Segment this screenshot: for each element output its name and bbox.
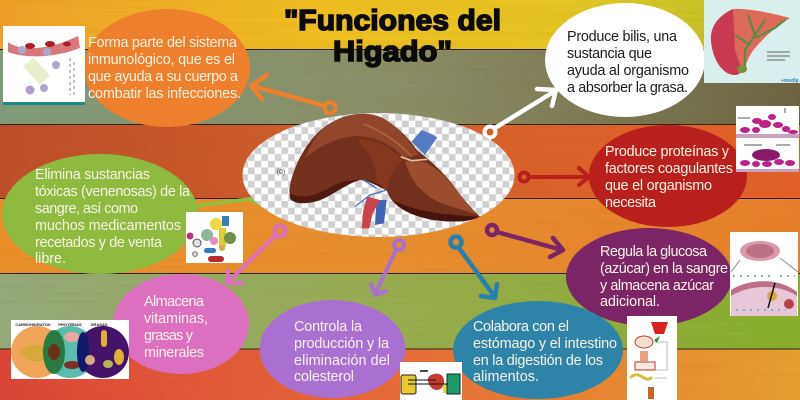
arrow: to proteins [520, 168, 589, 185]
icon: food plates: CARBOHIDRATOS [15, 322, 51, 327]
text: immune system: Forma parte del sistema [88, 35, 237, 51]
text: vitamins: minerales [144, 345, 204, 361]
icon: digestive diagram [627, 316, 677, 400]
icon: food plates [11, 320, 129, 379]
text: proteins: Produce proteínas y [605, 144, 730, 160]
panel: proteins [589, 125, 747, 227]
panel: glucose [566, 228, 732, 326]
text: vitamins: Almacena [144, 294, 204, 310]
arrow: to immune system [251, 75, 336, 114]
icon: immune system diagram [3, 26, 85, 105]
icon: cholesterol diagram [400, 362, 462, 400]
panel: toxin removal [2, 154, 198, 274]
text: glucose: (azúcar) en la sangre [600, 261, 728, 277]
text: bile: sustancia que [567, 46, 652, 62]
text: bile: Produce bilis, una [567, 29, 677, 45]
text: glucose: Regula la glucosa [600, 244, 707, 260]
text: bile: a absorber la grasa. [567, 80, 688, 96]
text: proteins: que el organismo [605, 178, 712, 194]
text: immune system: combatir las infecciones. [88, 86, 241, 102]
text: proteins: necesita [605, 195, 656, 211]
text: toxin removal: libre. [35, 251, 66, 267]
text: immune system: inmunológico, que es el [88, 52, 235, 68]
text: vitamins: grasas y [144, 328, 194, 344]
text: proteins [605, 144, 733, 211]
text: bile [567, 29, 689, 96]
title: Higado" [333, 36, 452, 68]
text: glucose: y almacena azúcar [600, 278, 714, 294]
arrow: to cholesterol [371, 240, 404, 295]
arrow: to toxins [195, 199, 258, 206]
text: digestion: en la digestión de los [473, 353, 603, 369]
text: digestion [473, 319, 617, 385]
text: proteins: factores coagulantes [605, 161, 733, 177]
panel: immune system [84, 9, 250, 127]
text: toxin removal: sangre, así como [35, 201, 138, 217]
text: cholesterol: eliminación del [294, 353, 390, 369]
title [284, 5, 501, 68]
icon: food plates: GRASAS [90, 322, 108, 327]
text: cholesterol [294, 319, 390, 385]
text: cholesterol: producción y la [294, 336, 389, 352]
arrow: to digestion [450, 236, 497, 298]
arrow: to bile [484, 89, 556, 138]
text: toxin removal [35, 167, 190, 267]
icon: liver and bile ducts: +medlp [781, 78, 799, 84]
icon: food plates: PROTEÍNAS [58, 322, 82, 327]
text: digestion: Colabora con el [473, 319, 569, 335]
arrow: to glucose [487, 225, 563, 257]
icon: clotting diagram [736, 106, 799, 172]
text: glucose [600, 244, 728, 310]
panel: bile [545, 3, 705, 117]
text: cholesterol: colesterol [294, 369, 354, 385]
icon: liver and bile ducts [704, 0, 800, 84]
icon: glucose cell diagram [730, 232, 798, 316]
title: "Funciones del [284, 5, 501, 37]
icon: liver illustration [289, 114, 480, 228]
text: immune system [88, 35, 241, 102]
text: immune system: que ayuda a su cuerpo a [88, 69, 238, 85]
checkered ellipse [242, 113, 514, 237]
text: bile: ayuda al organismo [567, 63, 689, 79]
text: glucose: adicional. [600, 294, 660, 310]
text: digestion: estómago y el intestino [473, 336, 617, 352]
text: vitamins: vitaminas, [144, 311, 208, 327]
panel: cholesterol [260, 300, 406, 398]
text: toxin removal: recetados y de venta [35, 235, 162, 251]
icon: pills [186, 212, 243, 263]
text: cholesterol: Controla la [294, 319, 362, 335]
text: vitamins [144, 294, 208, 361]
small label: (0) [277, 169, 285, 176]
arrow: to vitamins [227, 226, 286, 283]
panel: digestion [453, 301, 623, 399]
central ellipse with liver [242, 113, 514, 237]
panel: vitamins [113, 274, 249, 374]
text: toxin removal: tóxicas (venenosas) de la [35, 184, 190, 200]
text: toxin removal: Elimina sustancias [35, 167, 150, 183]
text: digestion: alimentos. [473, 369, 539, 385]
text: toxin removal: muchos medicamentos [35, 218, 181, 234]
